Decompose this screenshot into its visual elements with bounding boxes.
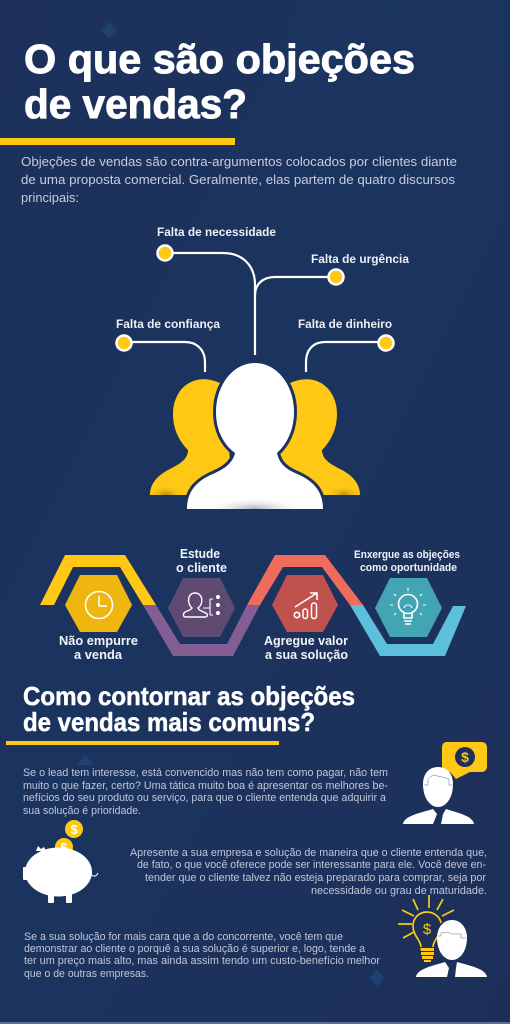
text block: apresente a empresa: de fato, o que você oferece pode ser interessante para ele. Você deve en-	[137, 859, 486, 871]
step 4: Enxergue as objeções como oportunidade: Enxergue as objeções	[354, 549, 460, 561]
intro text: principais:	[21, 190, 79, 205]
step 1: Não empurre a venda: Não empurre	[59, 634, 138, 648]
label: Falta de urgência: Falta de urgência	[311, 254, 410, 266]
icon: man with money speech bubble: $	[461, 749, 469, 765]
title: O que são objeções	[24, 36, 415, 82]
icon: left yellow person	[148, 379, 230, 505]
icon: right yellow person	[280, 379, 362, 505]
step 2: Estude o cliente: Estude	[180, 547, 220, 561]
text block: solução mais cara: Se a sua solução for mais cara que a do concorrente, você tem que	[24, 931, 343, 943]
text block: solução mais cara: ter um preço mais alto, mas ainda assim tendo um custo-benefício melhor	[24, 955, 380, 967]
text block: lead sem dinheiro: nefícios do seu produto ou serviço, para que o cliente entenda que adquirir a	[23, 792, 387, 804]
step 3: Agregue valor a sua solução: Agregue valor	[264, 634, 348, 648]
label: Falta de confiança: Falta de confiança	[116, 319, 221, 331]
text block: lead sem dinheiro: muito o que fazer, certo? Uma tática muito boa é apresentar os melhores be-	[23, 780, 388, 792]
label: Falta de dinheiro	[298, 319, 394, 350]
text block: lead sem dinheiro: sua solução é prioridade.	[23, 805, 141, 817]
icon: central white person	[187, 363, 323, 521]
step 1: Não empurre a venda	[40, 555, 156, 662]
step 2: Estude o cliente: o cliente	[176, 561, 227, 575]
intro text	[21, 154, 457, 205]
process strip	[40, 547, 466, 662]
text block: lead sem dinheiro: Se o lead tem interesse, está convencido mas não tem como pagar, não tem	[23, 767, 388, 779]
title	[24, 36, 415, 127]
step 3: Agregue valor a sua solução: a sua solução	[265, 648, 348, 662]
section underline	[6, 741, 279, 745]
text block: apresente a empresa: tender que o cliente talvez não esteja preparado para comprar, seja por	[145, 872, 486, 884]
text block: solução mais cara: demonstrar ao cliente o porquê a sua solução é superior e, logo, tende a	[24, 943, 366, 955]
text block: solução mais cara: que o de outras empresas.	[24, 968, 149, 980]
step 4: Enxergue as objeções como oportunidade: como oportunidade	[360, 562, 457, 574]
icon: piggy bank with coins: $	[70, 822, 78, 837]
text block: solução mais cara	[24, 931, 380, 980]
label: Falta de necessidade	[157, 227, 276, 260]
section heading	[23, 681, 355, 737]
label: Falta de confiança	[116, 319, 221, 350]
icon: man with light bulb idea	[398, 895, 487, 977]
text block: apresente a empresa	[130, 847, 487, 897]
diagram: four objections	[116, 227, 410, 521]
icon: man with light bulb idea: $	[423, 921, 432, 938]
section heading: Como contornar as objeções	[23, 681, 355, 711]
title underline	[0, 138, 235, 145]
label: Falta de dinheiro: Falta de dinheiro	[298, 319, 392, 331]
label: Falta de urgência	[311, 254, 410, 284]
text block: apresente a empresa: Apresente a sua empresa e solução de maneira que o cliente entenda que,	[130, 847, 487, 859]
icon: piggy bank with coins	[23, 820, 98, 903]
intro text: de uma proposta comercial. Geralmente, elas partem de quatro discursos	[21, 172, 456, 187]
step 3: Agregue valor a sua solução	[247, 555, 363, 662]
step 2: Estude o cliente	[143, 547, 260, 656]
section heading: de vendas mais comuns?	[23, 707, 315, 737]
step 4: Enxergue as objeções como oportunidade	[350, 549, 466, 656]
step 1: Não empurre a venda: a venda	[74, 648, 123, 662]
connector lines	[124, 253, 386, 372]
intro text: Objeções de vendas são contra-argumentos colocados por clientes diante	[21, 154, 457, 169]
text block: lead sem dinheiro	[23, 767, 388, 817]
title: de vendas?	[24, 81, 247, 127]
icon: piggy bank with coins: $	[60, 840, 68, 855]
icon: man with money speech bubble	[403, 742, 487, 824]
label: Falta de necessidade: Falta de necessidade	[157, 227, 276, 239]
text block: apresente a empresa: necessidade ou grau de maturidade.	[311, 885, 487, 897]
